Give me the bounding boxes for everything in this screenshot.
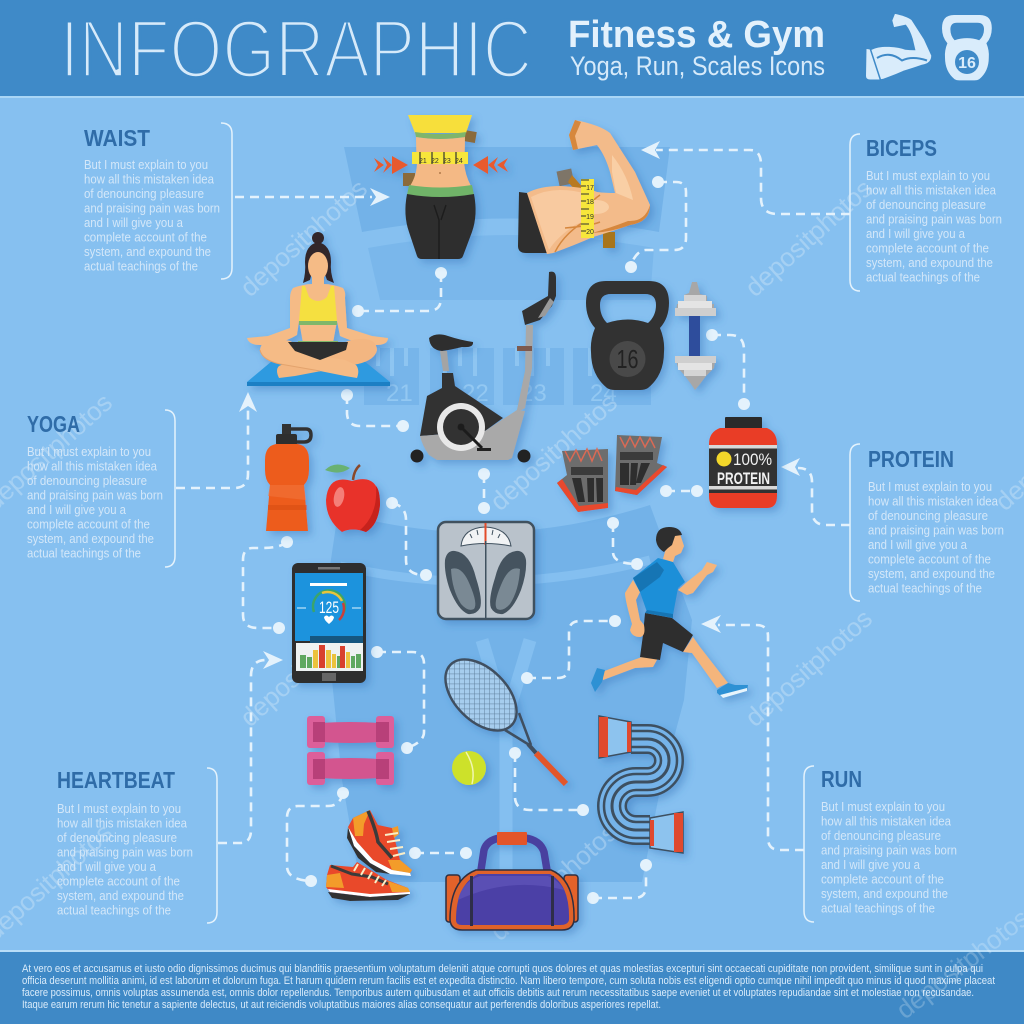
bracket: heartbeat [207, 768, 217, 923]
subtitle: Fitness & Gym: Fitness & Gym [568, 14, 825, 56]
footer text: Itaque earum rerum hic tenetur a sapiente delectus, ut aut reiciendis voluptatibus maiores alias consequatur aut perferendis doloribus asperiores repellat. [22, 999, 661, 1011]
connector: run text to runner [701, 615, 804, 850]
body: heartbeat: how all this mistaken idea [57, 816, 187, 830]
watermarks: depositphotos [484, 817, 623, 946]
icon: biceps [518, 120, 650, 254]
connector: racket to exerciser [509, 747, 589, 816]
icon: exercise bike [410, 272, 556, 462]
connector: protein text to protein [781, 458, 850, 525]
background silhouette [325, 147, 692, 882]
body: heartbeat: But I must explain to you [57, 802, 181, 816]
body: biceps: and praising pain was born [866, 212, 1002, 226]
connector: heartbeat text to phone [218, 651, 283, 843]
body: run: of denouncing pleasure [821, 829, 941, 843]
connector: phone to pink dumbbells [371, 646, 424, 754]
connector: biceps to kettlebell [625, 176, 686, 273]
body: heartbeat: complete account of the [57, 874, 180, 888]
body: waist: But I must explain to you [84, 158, 208, 172]
connector: gloves to runner [607, 517, 643, 570]
icon: protein jar [709, 417, 777, 508]
body: biceps [866, 169, 1002, 284]
icon: protein jar: 100% [733, 450, 772, 469]
watermarks: depositphotos [739, 603, 878, 732]
icon: sneakers [326, 810, 412, 901]
body: biceps: system, and expound the [866, 256, 993, 270]
background silhouette: 22 [462, 380, 489, 407]
icon: tennis racket [432, 646, 566, 784]
connector: yoga to bike [341, 389, 409, 432]
icon: protein jar: PROTEIN [717, 469, 770, 488]
body: run: system, and expound the [821, 887, 948, 901]
body: heartbeat: actual teachings of the [57, 904, 171, 918]
body: waist: complete account of the [84, 230, 207, 244]
footer band [0, 950, 1024, 1024]
icon: tennis ball [452, 751, 486, 785]
body: protein: complete account of the [868, 552, 991, 566]
background silhouette: 23 [520, 380, 547, 407]
body: heartbeat: system, and expound the [57, 889, 184, 903]
icon: yoga woman [247, 232, 390, 386]
icon: water bottle [265, 424, 311, 531]
panel: heartbeat text [57, 767, 217, 923]
watermarks: depositphotos [234, 603, 373, 732]
panel: protein text [850, 444, 1004, 601]
icon: header kettlebell [942, 15, 992, 80]
body: heartbeat [57, 802, 193, 918]
connector: bike to scale [478, 468, 490, 514]
header band [0, 0, 1024, 98]
watermarks: depositphotos [234, 173, 373, 302]
bracket: run [804, 766, 814, 922]
panel: yoga text [27, 410, 175, 567]
body: run: and praising pain was born [821, 844, 957, 858]
body: biceps: But I must explain to you [866, 169, 990, 183]
body: waist [84, 158, 220, 274]
body: waist: actual teachings of the [84, 260, 198, 274]
body: biceps: how all this mistaken idea [866, 184, 996, 198]
body: biceps: and I will give you a [866, 227, 965, 241]
icon: gym bag [446, 832, 578, 930]
body: run: how all this mistaken idea [821, 814, 951, 828]
heading: protein: PROTEIN [868, 446, 954, 472]
connector: racket to runner [521, 615, 621, 684]
connector: yoga text to yoga [176, 392, 257, 488]
connector: waist text to waist [235, 188, 390, 206]
connector: shoes to bag [409, 847, 472, 859]
body: biceps: complete account of the [866, 242, 989, 256]
body: waist: and praising pain was born [84, 202, 220, 216]
body: yoga: and I will give you a [27, 503, 126, 517]
bracket: biceps [850, 134, 860, 291]
connector: waist to yoga [352, 267, 447, 317]
body: protein: But I must explain to you [868, 480, 992, 494]
icon: pink dumbbells [307, 716, 394, 785]
icon: waist [374, 115, 508, 259]
body: waist: of denouncing pleasure [84, 187, 204, 201]
icon: silver dumbbell [675, 282, 716, 390]
icon: smartphone [292, 563, 366, 683]
subtitle: Yoga, Run, Scales Icons: Yoga, Run, Scales Icons [570, 51, 825, 81]
icon: biceps: 17 [586, 185, 594, 192]
body: protein: and I will give you a [868, 538, 967, 552]
body: run: actual teachings of the [821, 902, 935, 916]
panel: run text [804, 766, 957, 922]
connector: dumbbell to protein [706, 329, 750, 410]
bracket: waist [221, 123, 232, 279]
icon: biceps: 20 [586, 229, 594, 236]
icon: bathroom scale [438, 522, 534, 619]
body: yoga: system, and expound the [27, 532, 154, 546]
heading: yoga: YOGA [27, 411, 80, 437]
background silhouette: 21 [386, 380, 413, 407]
body: protein [868, 480, 1004, 596]
icon: header biceps [866, 13, 932, 80]
panel: waist text [84, 123, 232, 279]
bracket: yoga [165, 410, 175, 567]
icon: gloves [557, 435, 667, 512]
icon: waist: 24 [455, 158, 463, 165]
body: yoga: how all this mistaken idea [27, 460, 157, 474]
heading: waist: WAIST [84, 125, 150, 151]
body: waist: system, and expound the [84, 245, 211, 259]
body: biceps: actual teachings of the [866, 270, 980, 284]
body: yoga: But I must explain to you [27, 445, 151, 459]
body: yoga: actual teachings of the [27, 546, 141, 560]
connector: apple to scale [386, 497, 432, 581]
body: yoga: complete account of the [27, 518, 150, 532]
icon: smartphone: 125 [319, 598, 339, 617]
body: protein: actual teachings of the [868, 582, 982, 596]
body: yoga: of denouncing pleasure [27, 474, 147, 488]
connector: gloves to protein [660, 485, 703, 497]
icon: waist: 22 [431, 158, 439, 165]
body: yoga [27, 445, 163, 560]
icon: waist: 23 [443, 158, 451, 165]
body: protein: system, and expound the [868, 567, 995, 581]
icon: header kettlebell: 16 [958, 55, 976, 72]
body: run: But I must explain to you [821, 800, 945, 814]
icon: kettlebell: 16 [616, 344, 638, 374]
body: protein: how all this mistaken idea [868, 494, 998, 508]
panel: biceps text [850, 134, 1002, 291]
body: run: and I will give you a [821, 858, 920, 872]
body: protein: and praising pain was born [868, 524, 1004, 538]
footer text [22, 963, 995, 1011]
icon: biceps: 18 [586, 199, 594, 206]
connector: bottle to phone [243, 536, 293, 634]
body: yoga: and praising pain was born [27, 488, 163, 502]
connector: biceps text to biceps [641, 141, 850, 214]
icon: biceps: 19 [586, 214, 594, 221]
connector: bag to exerciser [587, 859, 652, 904]
body: biceps: of denouncing pleasure [866, 198, 986, 212]
watermarks: depositphotos [739, 173, 878, 302]
body: waist: how all this mistaken idea [84, 172, 214, 186]
icon: waist: 21 [419, 158, 427, 165]
heading: biceps: BICEPS [866, 135, 937, 161]
connector: dumbbells to shoes [287, 787, 349, 887]
icon: apple [325, 464, 380, 532]
icon: hand exerciser [599, 716, 683, 853]
icon: kettlebell [586, 281, 669, 390]
icon: runner [591, 527, 748, 698]
background silhouette: 24 [590, 380, 617, 407]
body: heartbeat: of denouncing pleasure [57, 831, 177, 845]
body: waist: and I will give you a [84, 216, 183, 230]
body: run: complete account of the [821, 872, 944, 886]
body: heartbeat: and I will give you a [57, 860, 156, 874]
body: heartbeat: and praising pain was born [57, 846, 193, 860]
body: run [821, 800, 957, 916]
heading: heartbeat: HEARTBEAT [57, 767, 175, 793]
body: protein: of denouncing pleasure [868, 509, 988, 523]
watermarks: depositphotos [484, 387, 623, 516]
title: INFOGRAPHIC [60, 4, 532, 95]
bracket: protein [850, 444, 860, 601]
heading: run: RUN [821, 766, 862, 792]
